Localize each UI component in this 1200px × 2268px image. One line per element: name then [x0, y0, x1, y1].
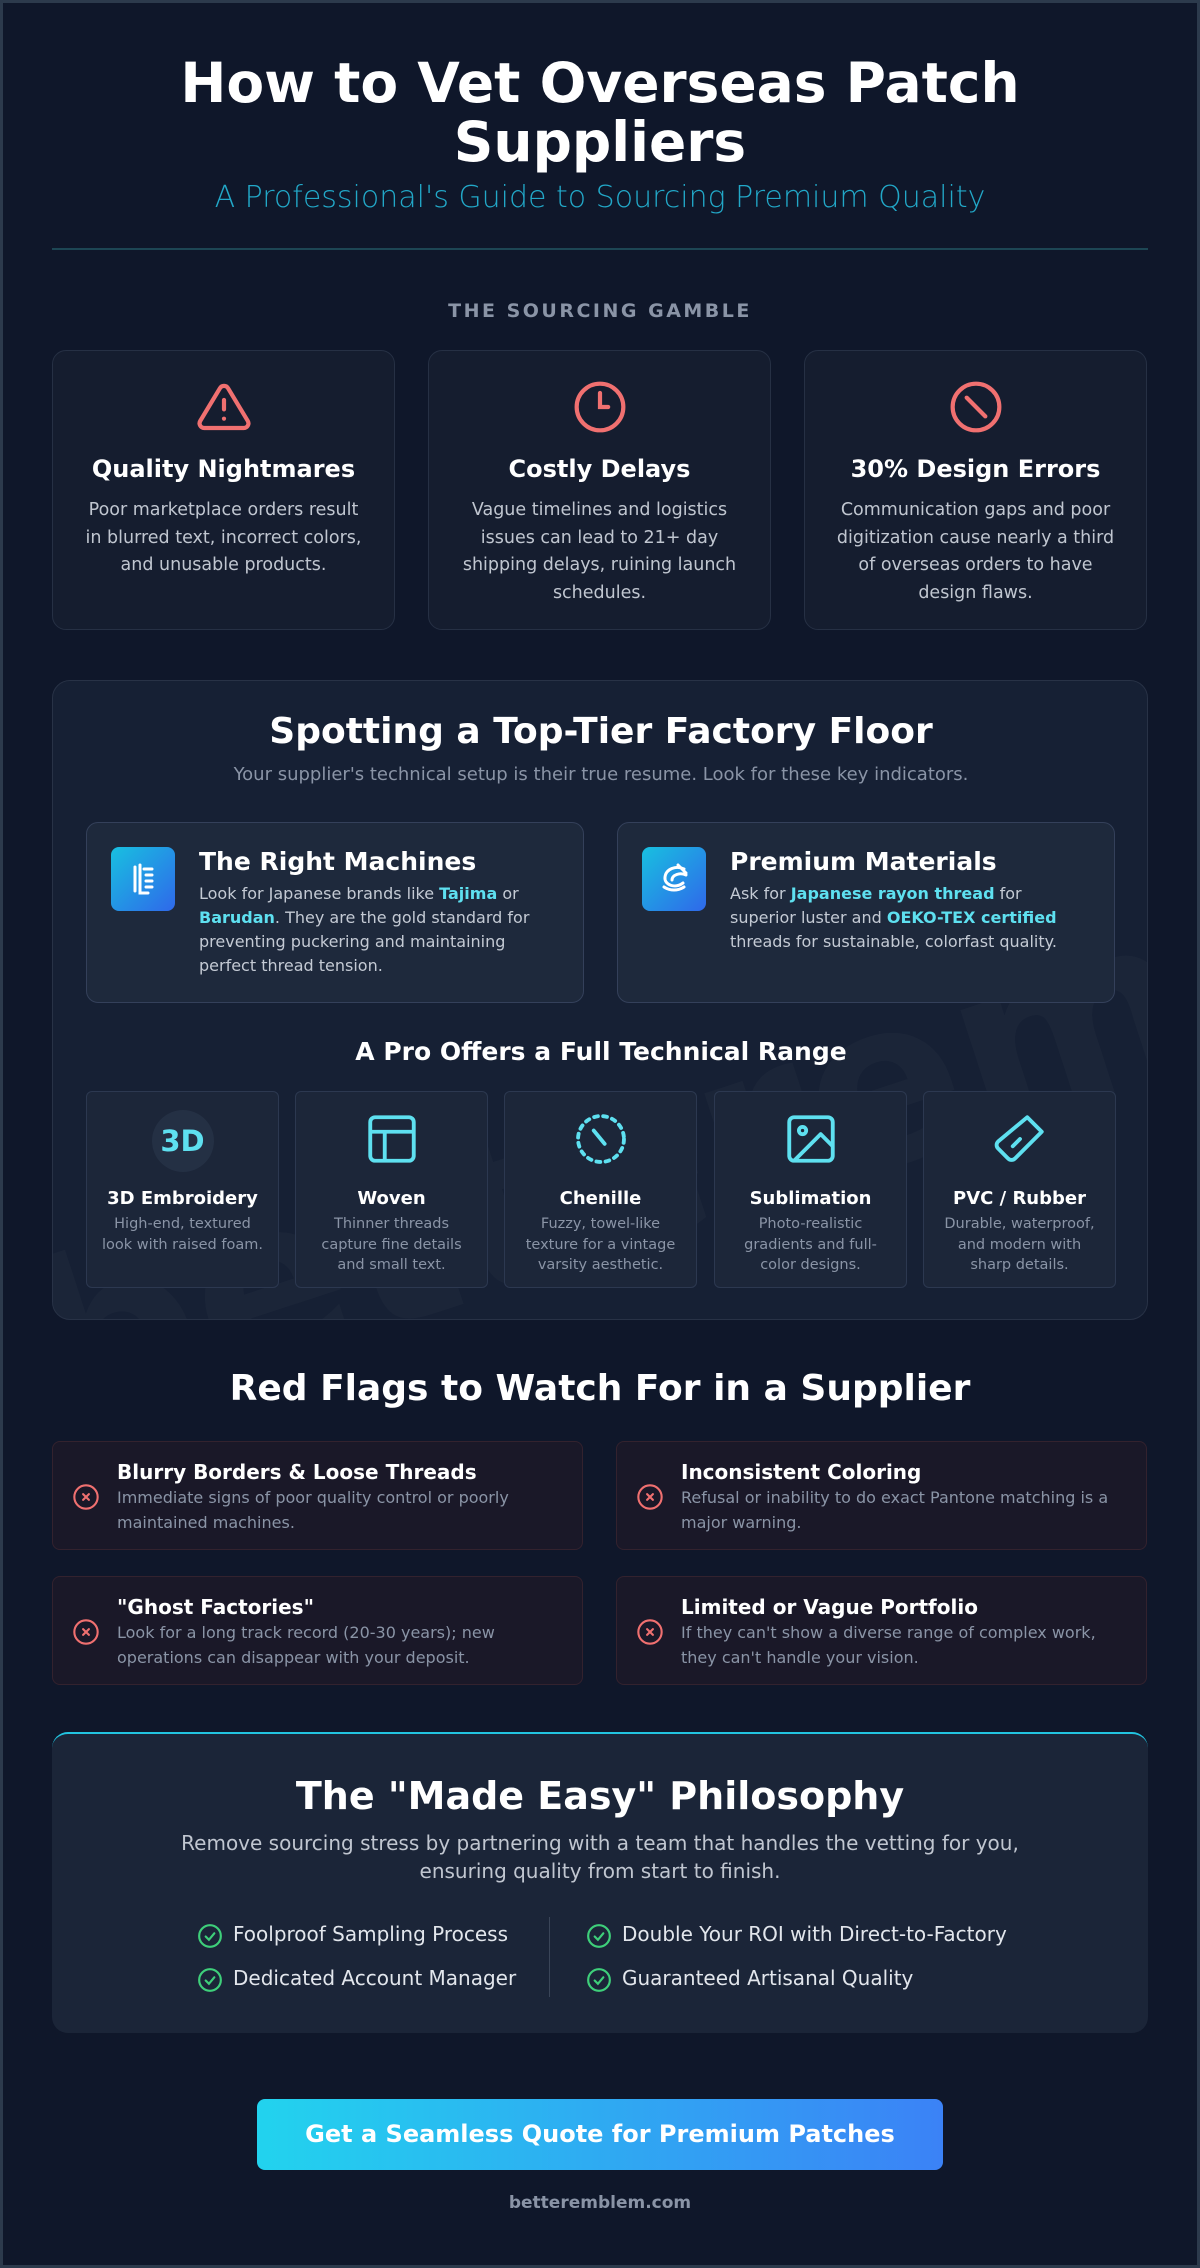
heading: red flags: Red Flags to Watch For in a Supplier [230, 1368, 970, 1409]
icon: thread [642, 847, 706, 911]
card: costly delays [428, 350, 771, 630]
card: quality nightmares [52, 350, 395, 630]
icon: 3D [152, 1110, 214, 1172]
card: costly delays: Costly Delays [509, 455, 690, 483]
checklist: Dedicated Account Manager [233, 1966, 516, 1990]
flag: limited portfolio: Limited or Vague Portfolio [681, 1595, 978, 1619]
cta button [257, 2099, 943, 2170]
flag: limited portfolio: If they can't show a diverse range of complex work, they can't handle your vision. [681, 1623, 1096, 1667]
flag: blurry borders [52, 1441, 583, 1550]
small card: sublimation: Photo-realistic gradients and full-color designs. [744, 1216, 877, 1273]
card: design errors: Communication gaps and poor digitization cause nearly a third of overseas orders to have design flaws. [837, 500, 1114, 602]
panel title: Spotting a Top-Tier Factory Floor [269, 711, 933, 752]
card: quality nightmares: Poor marketplace orders result in blurred text, incorrect colors, and unusable products. [86, 500, 361, 575]
small card: chenille [504, 1091, 697, 1288]
subcard: premium materials: Premium Materials [730, 847, 997, 876]
icon: layout [368, 1115, 416, 1163]
subcard: right machines: The Right Machines [199, 847, 476, 876]
small card: sublimation: Sublimation [750, 1188, 871, 1209]
flag: ghost factories: Look for a long track record (20-30 years); new operations can disappear with your deposit. [117, 1623, 495, 1667]
card: costly delays: Vague timelines and logistics issues can lead to 21+ day shipping delays, ruining launch schedules. [463, 500, 736, 602]
panel subtitle: Your supplier's technical setup is their true resume. Look for these key indicators. [234, 764, 968, 785]
section label: the sourcing gamble: THE SOURCING GAMBLE [448, 300, 752, 322]
flag: ghost factories [52, 1576, 583, 1685]
subcard: right machines: Look for Japanese brands like Tajima or Barudan. They are the gold standard for preventing puckering and maintaining perfect thread tension. [199, 884, 529, 975]
icon: dashed circle [576, 1114, 626, 1164]
icon: warning [197, 384, 251, 430]
subcard: premium materials: Ask for Japanese rayon thread for superior luster and OEKO-TEX certified threads for sustainable, colorfast quality. [730, 884, 1057, 951]
flag: inconsistent coloring [616, 1441, 1147, 1550]
made easy title: The "Made Easy" Philosophy [296, 1774, 904, 1818]
checklist: Foolproof Sampling Process [233, 1922, 508, 1946]
icon: 3D: 3D [160, 1124, 205, 1158]
card: design errors: 30% Design Errors [851, 455, 1100, 483]
icon: tag [994, 1115, 1044, 1162]
small card: 3d: 3D Embroidery [107, 1188, 258, 1209]
icon: clock [574, 382, 626, 432]
small card: 3d [86, 1091, 279, 1288]
flag: blurry borders: Blurry Borders & Loose Threads [117, 1460, 477, 1484]
checklist [198, 1922, 1007, 1992]
icon: prohibited [950, 382, 1002, 432]
subtitle: A Professional's Guide to Sourcing Premium Quality [215, 180, 985, 215]
made easy description: Remove sourcing stress by partnering with a team that handles the vetting for you, [181, 1831, 1019, 1855]
title: Suppliers [454, 110, 746, 174]
made easy description: ensuring quality from start to finish. [420, 1859, 780, 1883]
flag: limited portfolio [616, 1576, 1147, 1685]
checklist: Double Your ROI with Direct-to-Factory [622, 1922, 1007, 1946]
subcard: premium materials [617, 822, 1115, 1003]
icon: image [787, 1115, 835, 1163]
flag: inconsistent coloring: Inconsistent Coloring [681, 1460, 921, 1484]
small card: pvc: PVC / Rubber [953, 1188, 1086, 1209]
panel: made easy [52, 1732, 1148, 2033]
card: quality nightmares: Quality Nightmares [92, 455, 355, 483]
cta button: Get a Seamless Quote for Premium Patches [305, 2120, 895, 2148]
flag: inconsistent coloring: Refusal or inability to do exact Pantone matching is a major warning. [681, 1488, 1108, 1532]
small card: chenille: Chenille [560, 1188, 641, 1209]
heading: technical range: A Pro Offers a Full Technical Range [355, 1037, 847, 1066]
made easy description [181, 1831, 1019, 1883]
small card: woven [295, 1091, 488, 1288]
footer: betteremblem.com [509, 2193, 691, 2213]
title [180, 51, 1020, 174]
small card: sublimation [714, 1091, 907, 1288]
small card: woven: Thinner threads capture fine details and small text. [321, 1216, 462, 1273]
flag: ghost factories: "Ghost Factories" [117, 1595, 314, 1619]
checklist: Guaranteed Artisanal Quality [622, 1966, 913, 1990]
small card: 3d: High-end, textured look with raised foam. [102, 1216, 263, 1252]
small card: chenille: Fuzzy, towel-like texture for a vintage varsity aesthetic. [526, 1216, 675, 1273]
small card: pvc: Durable, waterproof, and modern with sharp details. [944, 1216, 1095, 1273]
title: How to Vet Overseas Patch [180, 51, 1020, 115]
small card: pvc [923, 1091, 1116, 1288]
card: design errors [804, 350, 1147, 630]
small card: woven: Woven [357, 1188, 426, 1209]
icon: machine [111, 847, 175, 911]
flag: blurry borders: Immediate signs of poor quality control or poorly maintained machines. [117, 1488, 509, 1532]
subcard: right machines [86, 822, 584, 1003]
